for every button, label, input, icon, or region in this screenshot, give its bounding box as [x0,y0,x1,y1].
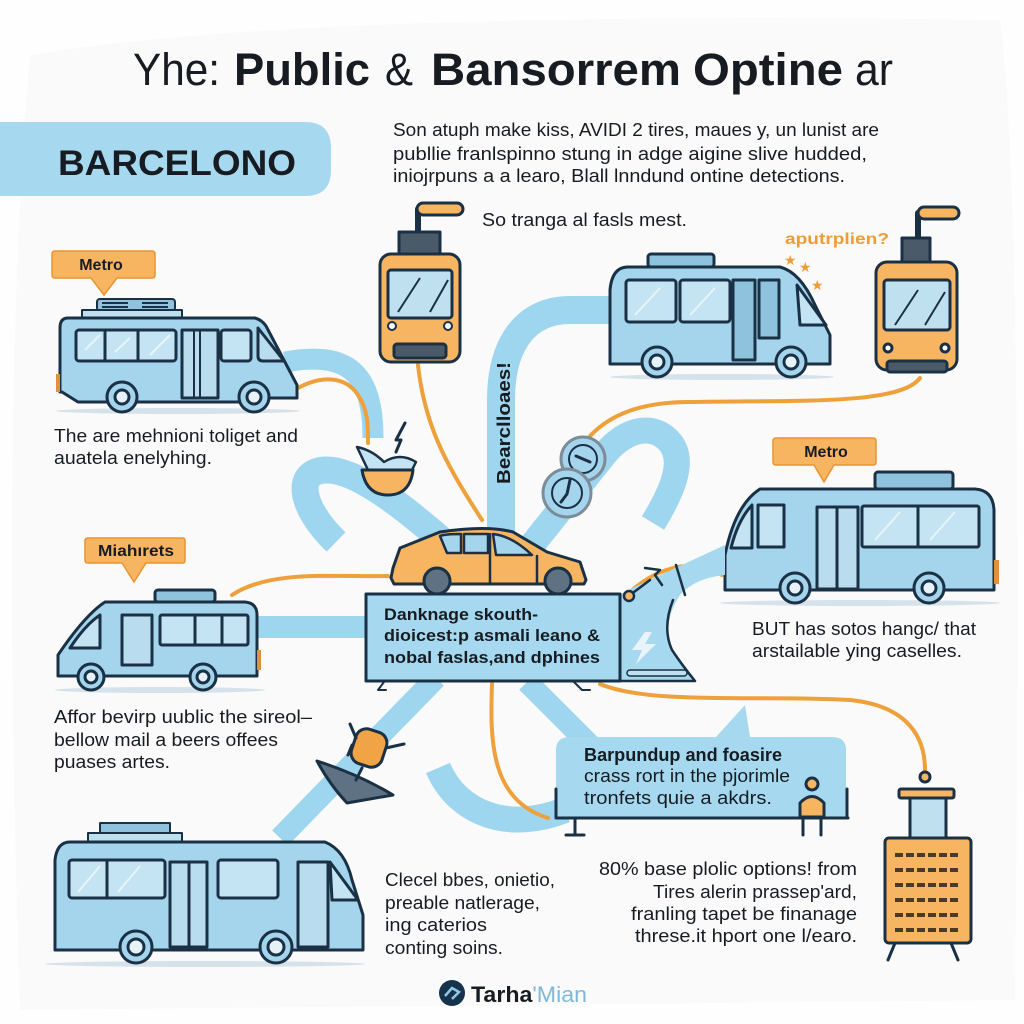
centre panel: Danknage skouth- [384,605,538,624]
intro text: publlie franlspinno stung in adge aigine slive hudded, [393,144,867,164]
suitcase shaped vehicle [885,772,971,960]
icon: bicycle [624,565,685,601]
vertical label: Bearclloaes! [494,362,514,484]
blue callout panel [556,705,848,835]
caption: bottom centre: Clecel bbes, onietio, [385,870,555,890]
caption: left middle: puases artes. [54,752,170,772]
banner: Barcelono [0,122,331,196]
orange label: Metro (left): Metro [79,257,123,274]
orange connector lines [232,365,925,818]
caption: bottom right: 80% base plolic options! from [599,859,857,879]
banner: Barcelono: BARCELONO [58,144,296,183]
caption: bottom centre [385,870,555,958]
caption: left top [54,426,298,468]
label: Miahırets: Miahırets [98,543,174,560]
orange note with stars: ★ [811,277,824,293]
centre panel: dioicest:p asmali leano & [384,626,600,645]
logo: Tarha'Mian [471,982,587,1007]
title: Bansorrem [431,44,681,95]
caption: bottom right: threse.it hport one l/earo. [635,926,857,946]
blue callout panel: crass rort in the pjorimle [584,766,790,786]
title: Yhe: [133,44,220,95]
subheading: So tranga al fasls mest. [482,210,687,230]
orange note with stars: ★ [784,252,797,268]
intro text: Son atuph make kiss, AVIDI 2 tires, maues y, un lunist are [393,120,879,140]
tram: right [876,207,959,372]
car [391,528,586,594]
centre panel [366,545,725,690]
light blue route network [256,310,677,838]
caption: bottom centre: conting soins. [385,938,503,958]
orange label: Metro (right): Metro [804,444,848,461]
caption: right [752,619,976,661]
caption: bottom right: Tires alerin prassep'ard, [653,882,857,902]
orange note with stars: aputrplien? [785,231,889,248]
orange label: Metro (right) [773,438,876,482]
orange label: Metro (left) [52,251,155,295]
caption: bottom centre: preable natlerage, [385,893,540,913]
icon: surfing robot [317,724,404,803]
caption: bottom right: franling tapet be finanage [631,904,857,924]
caption: left middle: bellow mail a beers offees [54,730,278,750]
intro text: iniojrpuns a a learo, Blall lnndund ontine detections. [393,166,845,186]
icon: round gauges [543,437,605,517]
title: Optine [693,44,843,95]
title: Public [234,44,370,95]
blue callout panel: tronfets quie a akdrs. [584,788,772,808]
centre panel: nobal faslas,and dphines [384,648,600,667]
orange note with stars [784,231,889,293]
blue callout panel: Barpundup and foasire [584,745,782,765]
icon: bowl [357,423,416,495]
caption: right: arstailable ying caselles. [752,641,962,661]
caption: bottom right [599,859,857,946]
bus: bottom left [45,823,365,967]
caption: bottom centre: ing caterios [385,915,487,935]
caption: right: BUT has sotos hangc/ that [752,619,976,639]
caption: left middle: Affor bevirp uublic the sireol– [54,707,312,727]
tram: top centre [380,203,463,362]
label: Miahırets [85,538,185,582]
intro text [393,120,879,186]
bus: top left [56,299,300,414]
title: & [385,44,413,95]
bus: top right [610,254,834,380]
title: ar [855,44,893,95]
caption: left top: The are mehnioni toliget and [54,426,298,446]
bus: right [720,472,1000,606]
bus: middle left [55,590,265,693]
title [133,44,893,95]
caption: left middle [54,707,312,772]
orange note with stars: ★ [799,259,812,275]
caption: left top: auatela enelyhing. [54,448,212,468]
